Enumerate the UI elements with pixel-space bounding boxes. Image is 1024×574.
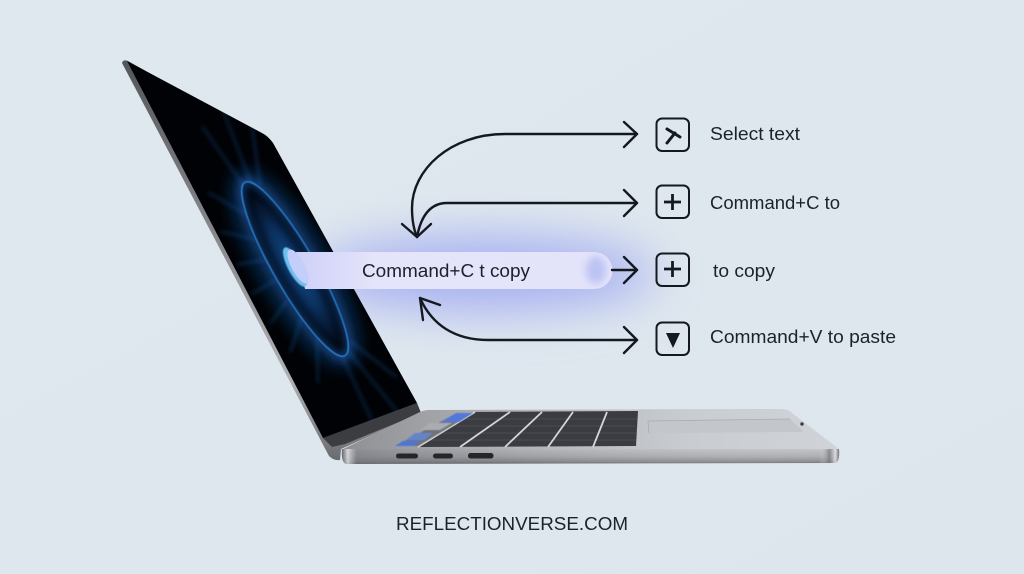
laptop ports (396, 453, 494, 458)
step 3: to copy (656, 254, 775, 286)
label: select text: Select text (710, 124, 800, 144)
laptop chin (323, 403, 421, 447)
step 4: command+V to paste (656, 322, 896, 355)
pill label: Command+C t copy (362, 261, 530, 281)
arrow: to copy (612, 257, 637, 283)
laptop (122, 60, 839, 464)
footer website: REFLECTIONVERSE.COM (396, 514, 628, 534)
label: command+V to paste: Command+V to paste (710, 327, 896, 347)
step 2: command+C (656, 186, 840, 218)
touch strip keys (395, 413, 473, 446)
highlighted command pill (278, 243, 612, 290)
label: to copy: to copy (713, 261, 775, 281)
laptop base deck (341, 409, 839, 450)
pill body (296, 252, 612, 289)
glow behind pill (315, 238, 655, 310)
arrow: command+V to paste (420, 298, 637, 353)
trackpad (648, 419, 804, 433)
label: command+C to: Command+C to (710, 193, 840, 213)
laptop screen (127, 61, 417, 455)
icon: triangle key (656, 322, 689, 355)
infographic canvas (122, 60, 896, 530)
step 1: select text (656, 118, 800, 151)
arrow: command+C to (402, 190, 637, 237)
icon: plus key (656, 254, 689, 286)
icon: chevron key (656, 118, 689, 151)
laptop front edge (342, 449, 839, 464)
keyboard (395, 411, 638, 447)
arrows (402, 122, 637, 353)
pill glowing end cap (278, 243, 314, 290)
icon: plus key (656, 186, 689, 218)
laptop lid edge (122, 60, 421, 460)
screen wallpaper swirl (200, 111, 400, 420)
arrow: select text (412, 122, 637, 237)
